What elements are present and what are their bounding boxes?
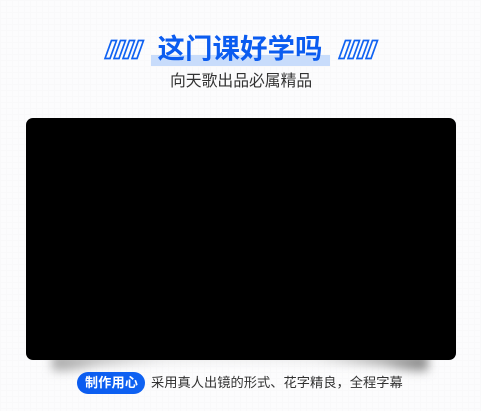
badge xyxy=(77,372,145,394)
heading block xyxy=(104,33,379,90)
caption row xyxy=(77,372,403,394)
title: 这门课好学吗 xyxy=(158,33,322,64)
title highlight bar xyxy=(151,55,330,66)
caption text: 采用真人出镜的形式、花字精良，全程字幕 xyxy=(151,375,403,390)
subtitle: 向天歌出品必属精品 xyxy=(170,72,312,90)
video panel xyxy=(26,118,456,360)
badge label: 制作用心 xyxy=(85,375,138,390)
video shadow xyxy=(46,360,435,378)
icon: right slashes xyxy=(338,40,379,60)
icon: left slashes xyxy=(104,40,145,60)
